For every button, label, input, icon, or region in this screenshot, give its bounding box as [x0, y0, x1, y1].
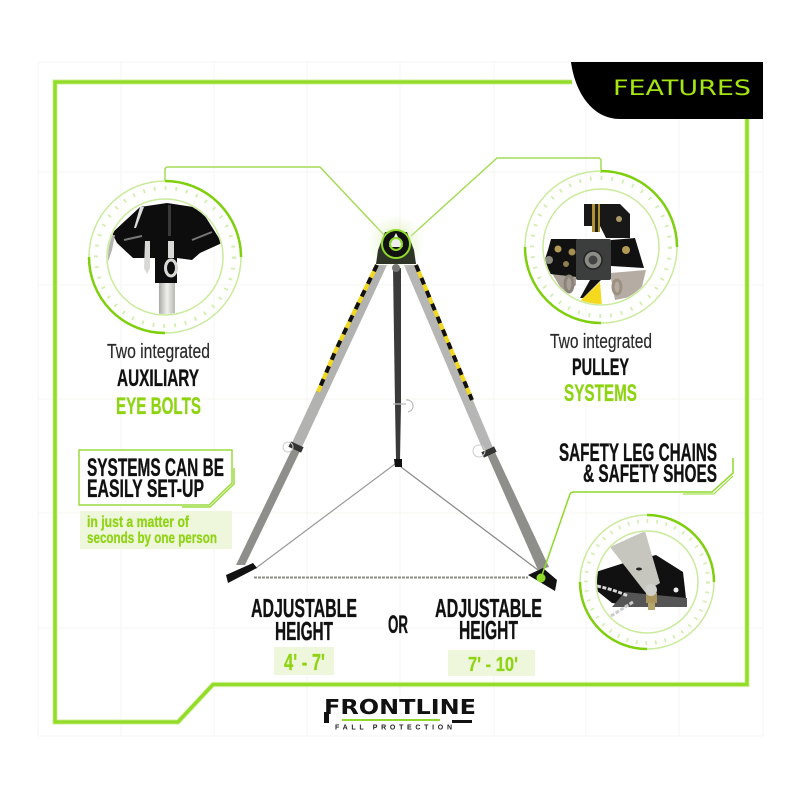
heading: ADJUSTABLE: [435, 593, 542, 623]
panel: eye bolts: [89, 181, 241, 420]
centre leg: [393, 268, 401, 460]
label: pulley systems: Two integrated: [550, 331, 652, 353]
label: eye bolts: Two integrated: [107, 341, 210, 363]
heading: HEIGHT: [275, 616, 333, 646]
heading: safety leg chains: [559, 439, 717, 488]
tripod head: [369, 216, 423, 272]
centre leg joint: [394, 459, 402, 467]
heading: safety leg chains: & SAFETY SHOES: [583, 460, 717, 488]
chain to right foot: [401, 467, 538, 570]
photo: pulley: [544, 204, 646, 306]
features tab: [571, 62, 763, 119]
value: 4' - 7': [284, 649, 325, 675]
label: eye bolts: [107, 341, 210, 420]
value box: [448, 650, 535, 676]
callout dot: [536, 574, 546, 582]
callout line: eye bolts: [165, 167, 385, 236]
ring gauge: [580, 515, 714, 649]
panel: easy set-up callout: [79, 450, 234, 549]
callout heading: [87, 454, 224, 503]
value: 7' - 10': [468, 654, 518, 676]
panel: pulley systems: [525, 171, 677, 407]
callout heading: EASILY SET-UP: [87, 475, 204, 503]
chain between feet: [254, 576, 528, 578]
callout border: [79, 450, 232, 505]
note text: in just a matter of: [87, 514, 190, 531]
heading: ADJUSTABLE: [251, 593, 357, 623]
label: pulley systems: PULLEY: [572, 354, 629, 381]
logo: frontline: [324, 695, 476, 732]
note text: [87, 514, 217, 547]
heading: HEIGHT: [459, 615, 518, 645]
tripod: [226, 216, 557, 591]
callout line: safety shoes: [541, 458, 733, 578]
right foot: [528, 568, 557, 591]
callout line: pulley: [411, 158, 601, 236]
photo: eye bolts: [107, 203, 222, 316]
chain to left foot: [256, 464, 395, 568]
callout line shadow: [683, 476, 733, 494]
label: eye bolts: EYE BOLTS: [116, 393, 201, 420]
photo: safety shoe: [596, 531, 687, 616]
value box: [274, 647, 334, 675]
right leg: [404, 265, 549, 570]
left leg: [236, 265, 387, 565]
heading: [435, 593, 542, 645]
label: pulley systems: [550, 331, 652, 407]
centre leg pin: [393, 400, 413, 412]
heading: [251, 593, 357, 646]
panel: safety leg chains: [536, 439, 733, 649]
logo: frontline: FRONTLINE: [324, 695, 476, 719]
left foot: [226, 563, 257, 583]
label: eye bolts: AUXILIARY: [117, 365, 199, 392]
ring gauge: [89, 181, 241, 333]
frame outline: [55, 82, 747, 722]
ring gauge: [525, 171, 677, 323]
label: pulley systems: SYSTEMS: [564, 380, 637, 407]
heading: features: FEATURES: [613, 76, 751, 100]
pale note box: [80, 511, 232, 549]
logo: frontline: FALL PROTECTION: [335, 724, 452, 732]
callout heading: SYSTEMS CAN BE: [87, 454, 224, 482]
callout shadow edge: [182, 468, 234, 507]
or label: OR: [388, 611, 408, 639]
panel: adjustable height low: [251, 593, 357, 675]
panel: adjustable height high: [435, 593, 542, 676]
note text: seconds by one person: [87, 530, 217, 547]
